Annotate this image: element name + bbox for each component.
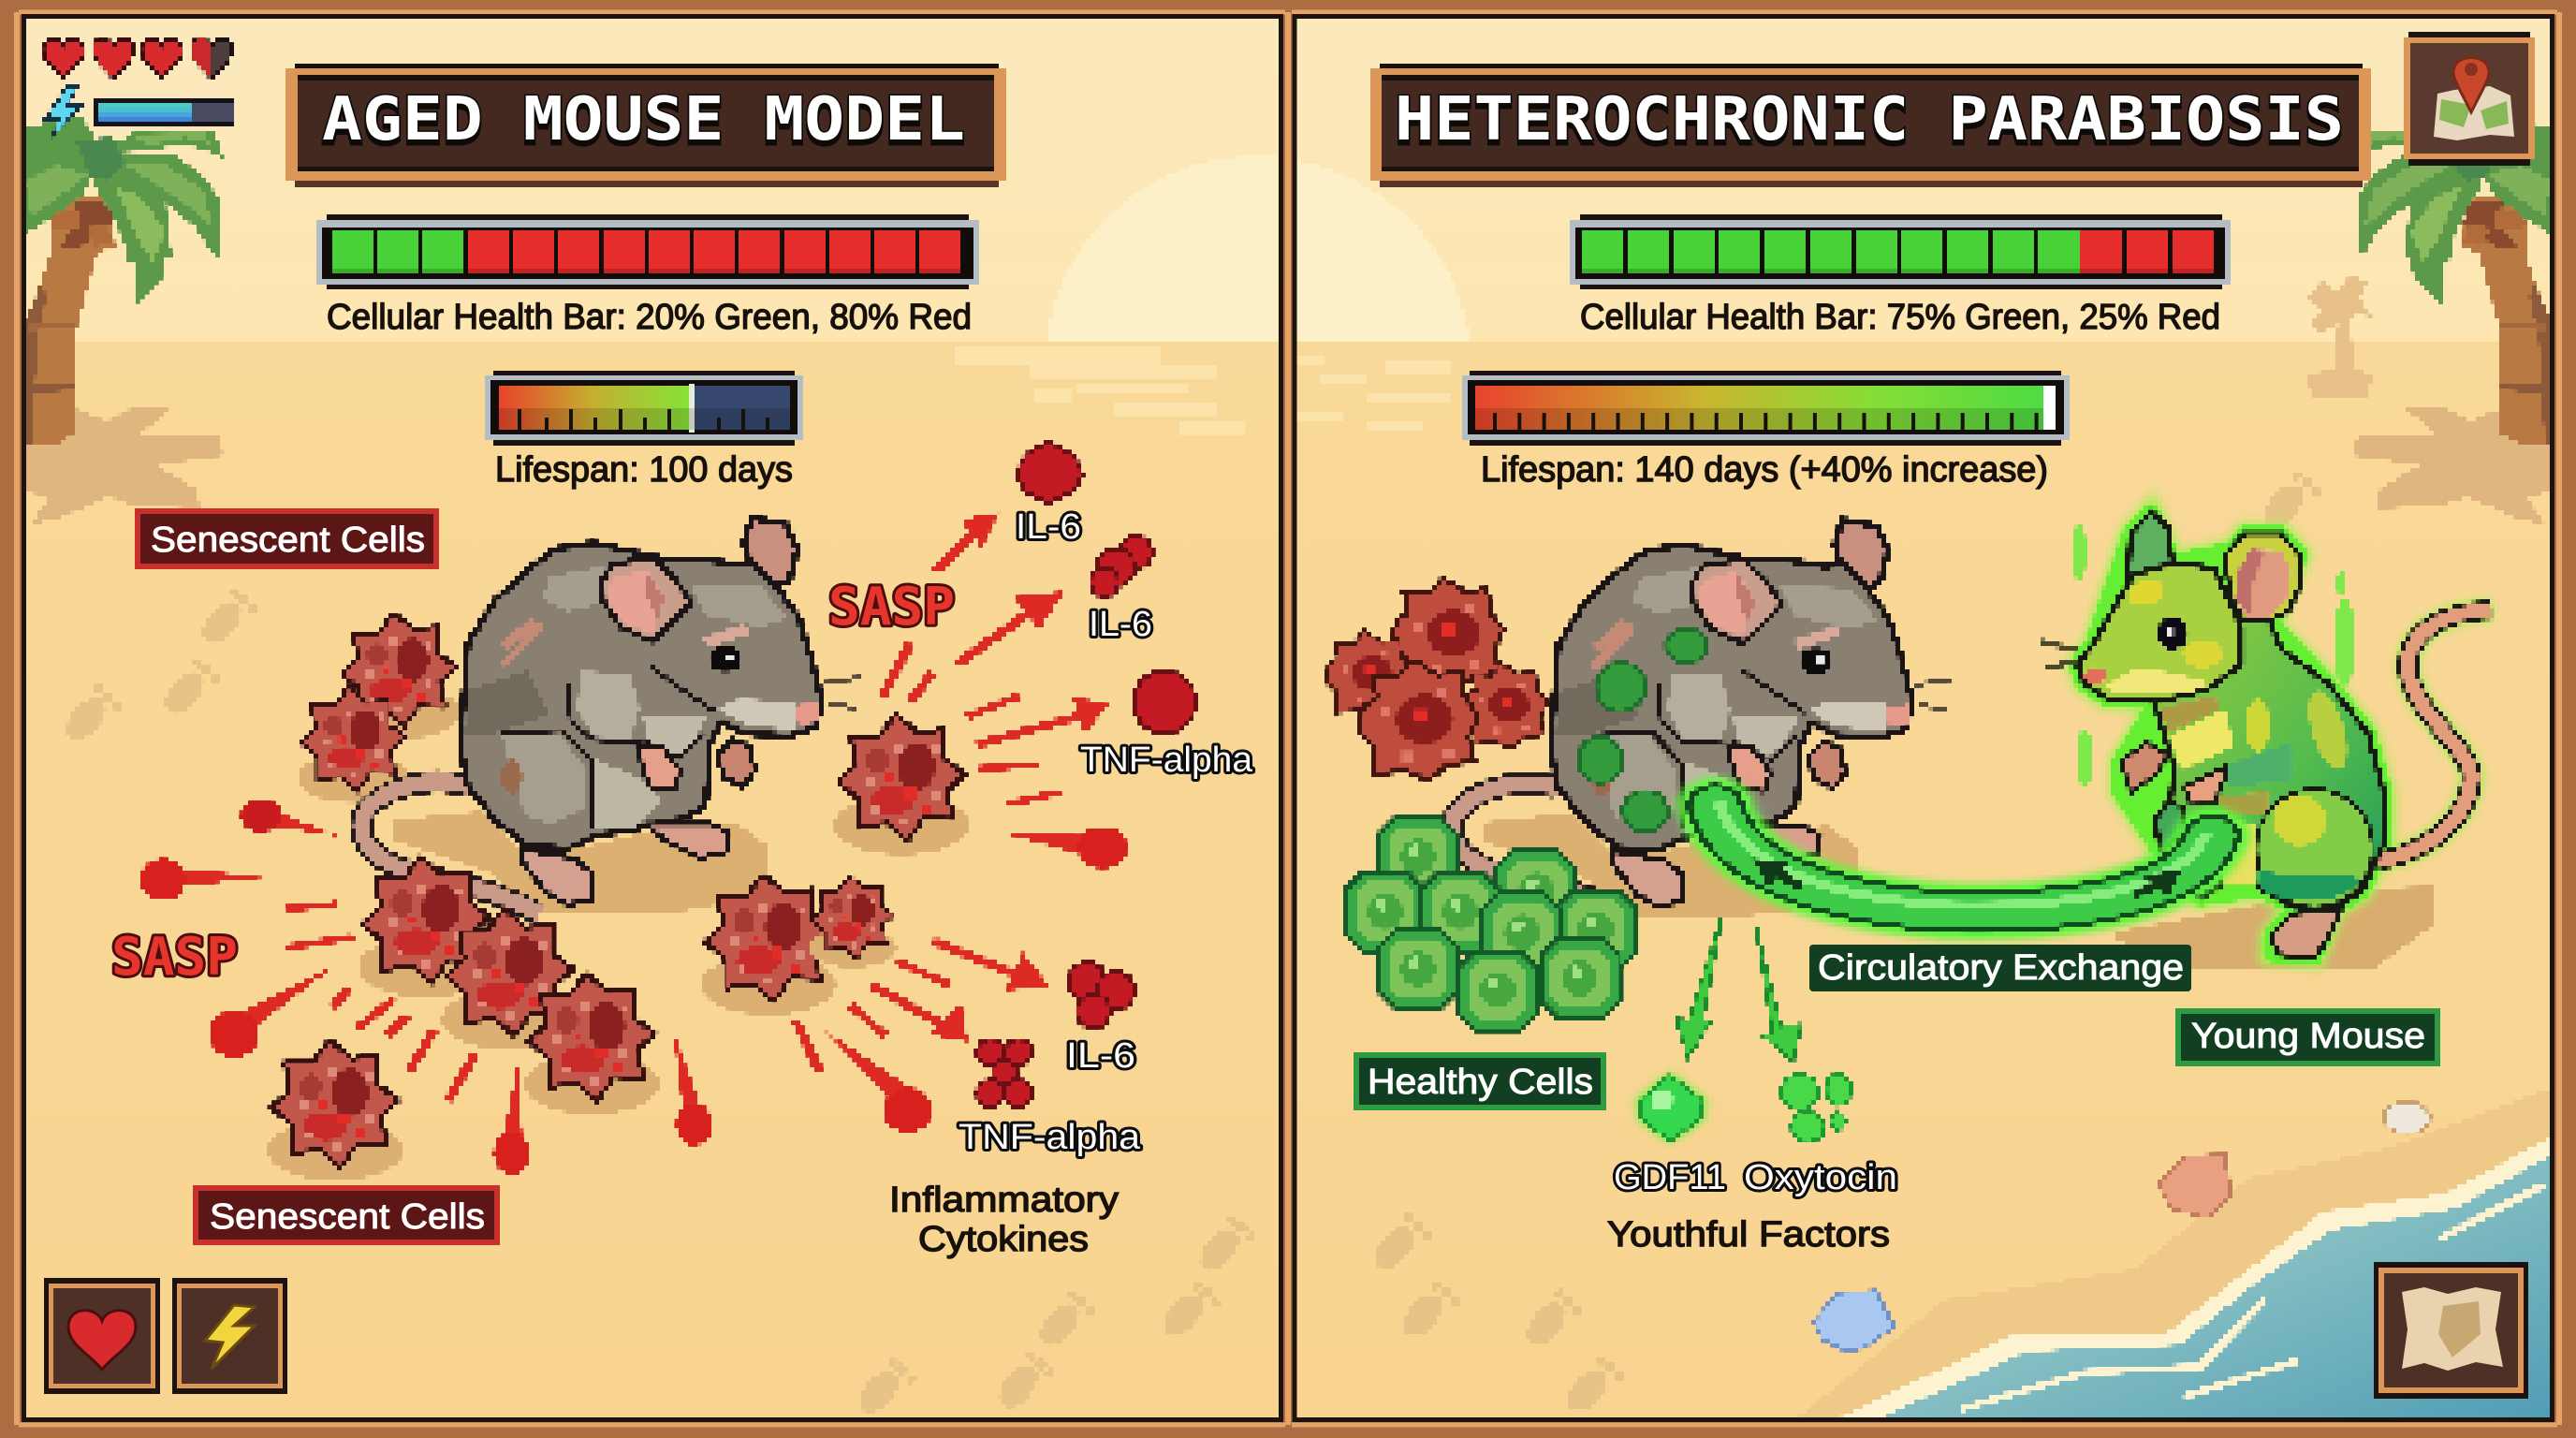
- shell: blue: [1814, 1291, 1895, 1351]
- cytokine label IL-6 second: IL-6: [1089, 605, 1152, 644]
- panel background: left sky and sand: [26, 19, 1280, 1417]
- palm shadow: [12, 407, 223, 524]
- shell: white pebble: [2384, 1102, 2430, 1134]
- senescent cell: bottom: [268, 1040, 402, 1181]
- footprints: [60, 588, 1256, 1420]
- label: Inflammatory Cytokines: Cytokines: [918, 1220, 1089, 1259]
- title text: AGED MOUSE MODEL: [322, 85, 965, 154]
- button: heart: [44, 1278, 160, 1394]
- senescent cell: emitting SASP: [834, 714, 969, 855]
- right lifespan bar: [1462, 371, 2070, 446]
- scenery and artwork: right panel: [1296, 115, 2569, 1418]
- beach water and foam: [1797, 1081, 2569, 1418]
- cytokine blobs: [977, 441, 1195, 1107]
- palm shadow: [2353, 407, 2564, 524]
- right health bar label: Cellular Health Bar: 75% Green, 25% Red: [1580, 298, 2220, 337]
- button: lightning: [172, 1278, 287, 1394]
- left health bar label: Cellular Health Bar: 20% Green, 80% Red: [327, 298, 972, 337]
- sun: [1046, 156, 1280, 342]
- label: Healthy Cells: Healthy Cells: [1368, 1063, 1593, 1102]
- right title plate: [1370, 64, 2371, 187]
- label: Healthy Cells: [1356, 1055, 1603, 1108]
- HUD hearts: [43, 38, 232, 79]
- label: Inflammatory Cytokines: [889, 1181, 1119, 1259]
- left cellular health bar: [316, 214, 979, 289]
- left lifespan bar: [485, 371, 803, 446]
- label: Oxytocin: Oxytocin: [1744, 1158, 1897, 1197]
- button: treasure map: [2374, 1262, 2528, 1399]
- scenery and artwork: left panel: [12, 38, 1280, 1420]
- label: Senescent Cells bottom: Senescent Cells: [210, 1197, 485, 1237]
- label: Young Mouse: [2178, 1011, 2437, 1064]
- label: Young Mouse: Young Mouse: [2191, 1017, 2425, 1056]
- far palm silhouette: [2306, 276, 2372, 398]
- label: Youthful Factors: Youthful Factors: [1607, 1215, 1890, 1255]
- label: Circulatory Exchange: Circulatory Exchange: [1818, 948, 2184, 988]
- SASP label lower: SASP: [111, 927, 238, 988]
- healthy cells: [1346, 817, 1635, 1030]
- cytokine label TNF-alpha upper: TNF-alpha: [1080, 741, 1253, 780]
- left lifespan label: Lifespan: 100 days: [495, 450, 793, 490]
- green factor arrows: [1676, 917, 1801, 1062]
- cytokine label IL-6 lower: IL-6: [1066, 1036, 1135, 1076]
- label: Senescent Cells bottom: [196, 1188, 497, 1242]
- palm tree: [2353, 115, 2564, 447]
- label: Inflammatory Cytokines: Inflammatory: [889, 1181, 1119, 1220]
- palm tree: [12, 115, 223, 447]
- SASP label upper: SASP: [828, 577, 955, 638]
- panel background: right sky and sand: [1296, 19, 2550, 1417]
- aged mouse: [1452, 520, 1952, 917]
- cytokine label IL-6 top: IL-6: [1016, 507, 1081, 547]
- right cellular health bar: [1570, 214, 2231, 289]
- GDF11 factor gem: [1637, 1072, 1705, 1143]
- aged mouse: [361, 518, 861, 915]
- horizon shimmer: [1296, 354, 1451, 433]
- senescent cells: lower chain: [359, 857, 659, 1114]
- senescent cells: right cluster: [701, 874, 897, 1015]
- left title plate: [285, 64, 1006, 187]
- sun: [1296, 161, 1470, 342]
- green rejuvenation spots: [1578, 629, 1707, 832]
- shell: pink: [2159, 1154, 2231, 1218]
- young mouse: [2041, 512, 2492, 970]
- title text: HETEROCHRONIC PARABIOSIS: [1395, 85, 2344, 154]
- senescent cells: upper cluster: [298, 613, 460, 802]
- unhealthy red cells: [1325, 578, 1547, 780]
- label: Senescent Cells top: [138, 511, 436, 566]
- horizon shimmer: [955, 348, 1245, 434]
- Oxytocin factor cluster: [1781, 1074, 1851, 1141]
- HUD energy bolt: [45, 86, 82, 138]
- right lifespan label: Lifespan: 140 days (+40% increase): [1481, 450, 2048, 490]
- cytokine label TNF-alpha lower: TNF-alpha: [959, 1118, 1141, 1157]
- HUD energy bar: [95, 96, 234, 127]
- label: Senescent Cells top: Senescent Cells: [151, 521, 425, 560]
- SASP particles and arrows: [139, 513, 1127, 1174]
- button: map pin: [2404, 32, 2535, 166]
- label: GDF11: GDF11: [1614, 1158, 1726, 1197]
- footprints: [1368, 471, 2320, 1418]
- circulatory tube with arrows: [1715, 802, 2212, 912]
